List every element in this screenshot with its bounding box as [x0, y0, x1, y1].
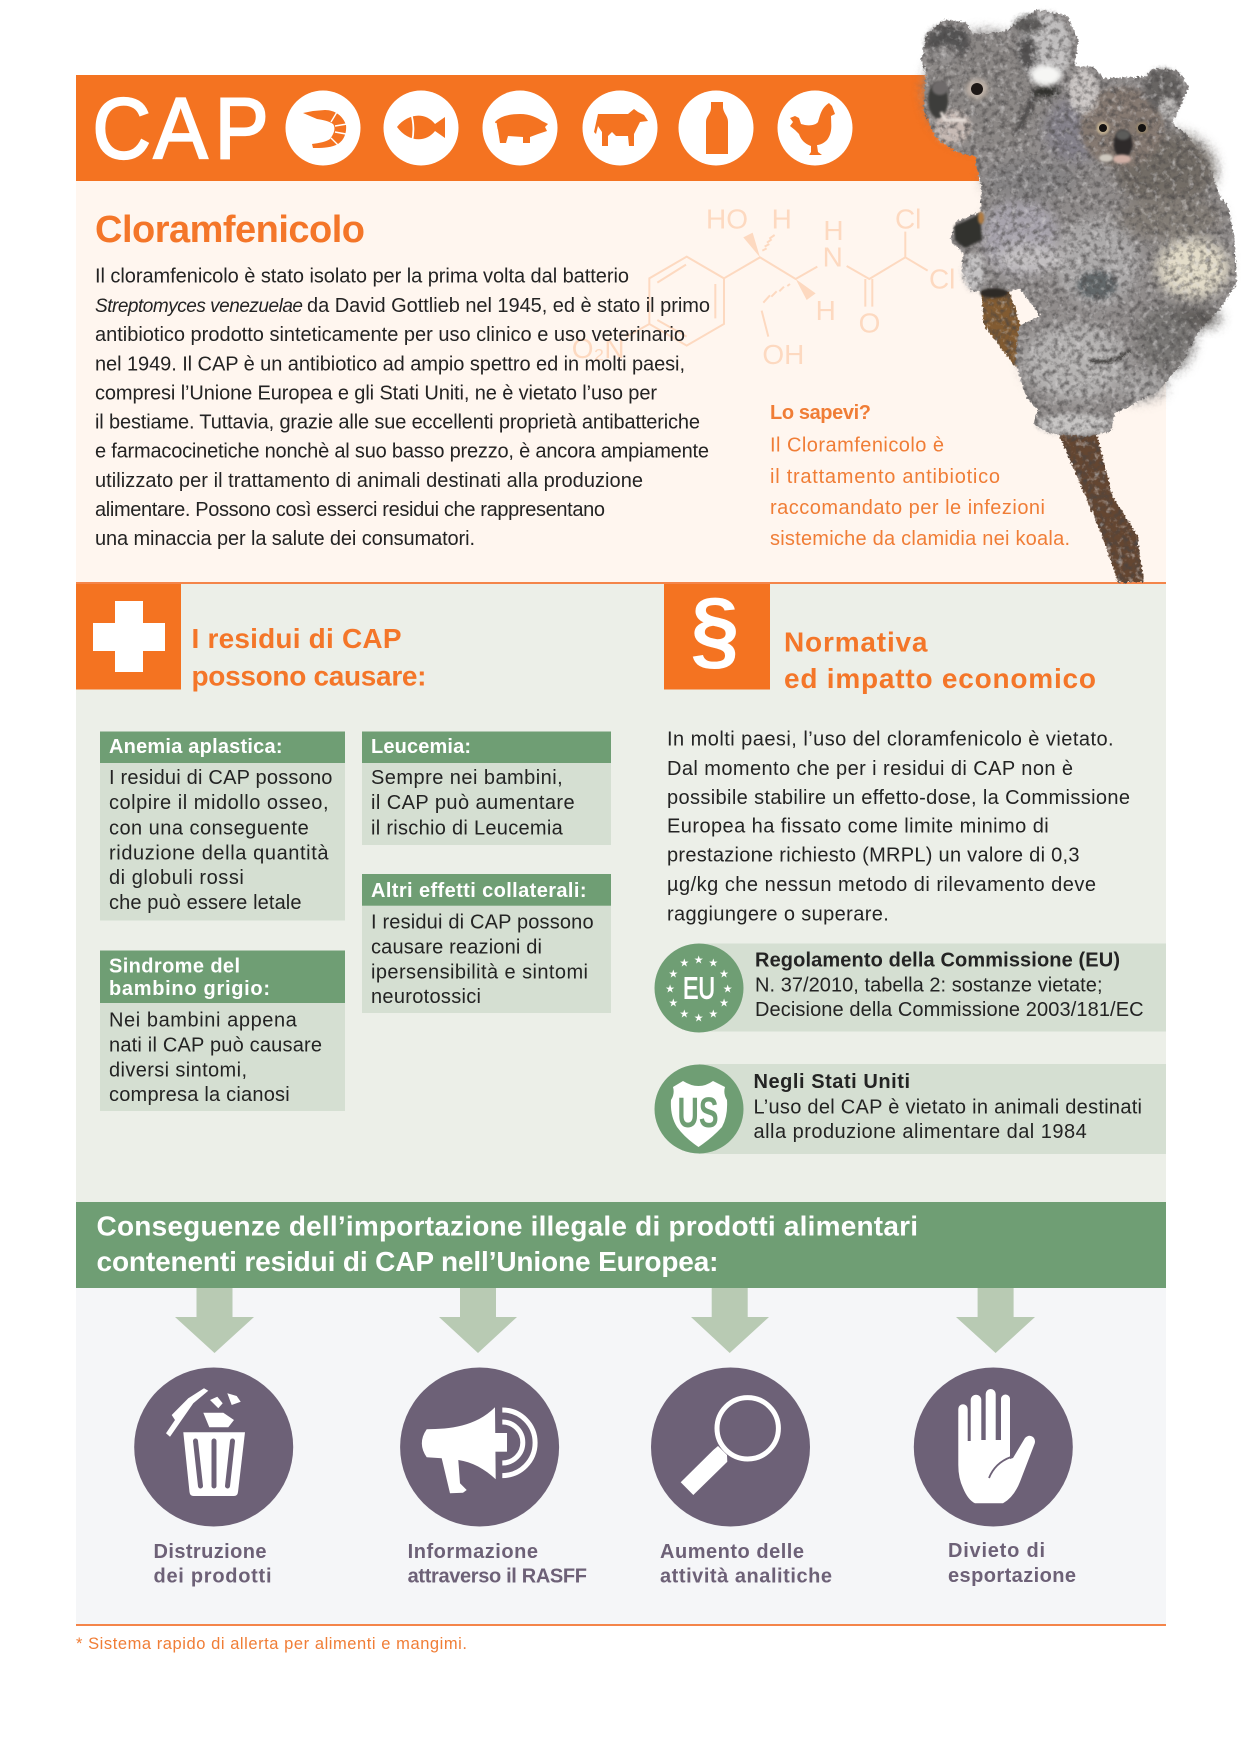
callout: United States: Negli Stati Uniti — [754, 1071, 910, 1093]
card: Sindrome del bambino grigio — [100, 950, 345, 1111]
icon: US shield badge — [654, 1064, 744, 1154]
text block: regulation: prestazione richiesto (MRPL) un valore di 0,3 — [667, 845, 1080, 867]
text block: regulation: raggiungere o superare. — [667, 904, 889, 926]
icon: EU stars badge — [654, 944, 744, 1032]
chemical structure watermark: Cl — [929, 263, 955, 294]
callout: United States — [654, 1064, 1166, 1154]
icon box: medical cross — [76, 584, 181, 690]
heading: Normativa ed impatto economico: Normativa — [784, 626, 928, 658]
icon: EU stars badge: ★ — [708, 958, 718, 970]
arrow 2 — [439, 1288, 517, 1353]
body shading — [982, 198, 1058, 274]
text block: regulation — [667, 729, 1130, 926]
callout: EU regulation: Regolamento della Commissione (EU) — [755, 950, 1120, 972]
icon: EU stars badge: ★ — [708, 1008, 718, 1020]
banner: consequences of illegal import: Conseguenze dell’importazione illegale di prodotti alimentari — [96, 1211, 918, 1242]
chemical structure watermark — [572, 203, 955, 370]
text block: intro: Il cloramfenicolo è stato isolato per la prima volta dal batterio — [95, 266, 629, 288]
label: analytics: Aumento delle — [660, 1541, 804, 1563]
icon: EU stars badge: ★ — [694, 1012, 704, 1024]
chemical structure watermark: H — [772, 203, 792, 234]
banner: consequences of illegal import — [76, 1202, 1166, 1288]
icon: EU stars badge: ★ — [719, 997, 729, 1009]
panel: intro background — [76, 181, 1166, 583]
card: Sindrome del bambino grigio: compresa la cianosi — [109, 1084, 290, 1106]
big koala head — [925, 32, 1045, 148]
header banner — [76, 75, 979, 181]
chemical structure watermark: O — [859, 308, 880, 339]
text block: regulation: possibile stabilire un effetto-dose, la Commissione — [667, 787, 1130, 809]
text block: intro: il bestiame. Tuttavia, grazie alle sue eccellenti proprietà antibatteriche — [95, 412, 700, 434]
icon: EU stars badge: ★ — [694, 954, 704, 966]
callout: Lo sapevi?: Il Cloramfenicolo è — [770, 435, 944, 457]
card: Anemia aplastica: di globuli rossi — [109, 867, 244, 889]
chemical structure watermark: H — [823, 215, 844, 246]
card: Altri effetti collaterali: I residui di CAP possono — [371, 912, 594, 934]
card: Leucemia: il rischio di Leucemia — [371, 818, 564, 840]
card: Leucemia: il CAP può aumentare — [371, 792, 575, 814]
arrow 4 — [956, 1288, 1035, 1353]
faces and paw — [928, 65, 1148, 298]
icon: magnifying glass — [651, 1368, 810, 1526]
text block: intro: una minaccia per la salute dei consumatori. — [95, 528, 475, 550]
icon: shrimp — [286, 90, 360, 166]
icon: raised hand — [914, 1368, 1073, 1526]
text block: intro: utilizzato per il trattamento di animali destinati alla produzione — [95, 470, 643, 492]
icon: EU stars badge: ★ — [668, 968, 678, 980]
icon: fish — [384, 90, 458, 166]
icon: chicken — [778, 90, 852, 166]
card: Altri effetti collaterali — [362, 874, 611, 1013]
arrow 3 — [691, 1288, 769, 1353]
chemical structure watermark: Cl — [895, 203, 921, 234]
icon: milk bottle — [678, 90, 754, 166]
icon: waste bin — [134, 1368, 293, 1526]
text block: regulation: Dal momento che per i residui di CAP non è — [667, 758, 1073, 780]
card: Sindrome del bambino grigio: diversi sintomi, — [109, 1059, 247, 1081]
label: RASFF: Informazione — [408, 1541, 538, 1563]
icon: megaphone — [400, 1368, 559, 1526]
card: Altri effetti collaterali: neurotossici — [371, 986, 481, 1008]
footnote: * Sistema rapido di allerta per alimenti e mangimi. — [76, 1635, 467, 1653]
chemical structure watermark: O₂N — [572, 333, 625, 364]
card: Sindrome del bambino grigio: bambino grigio: — [109, 978, 270, 1000]
label: destruction — [154, 1541, 272, 1588]
callout: Lo sapevi?: Lo sapevi? — [770, 402, 871, 424]
icon: EU stars badge: EU — [683, 971, 715, 1005]
card: Altri effetti collaterali: ipersensibilità e sintomi — [371, 961, 588, 983]
label: analytics: attività analitiche — [660, 1566, 832, 1588]
icon: EU stars badge: ★ — [719, 968, 729, 980]
icon: EU stars badge: ★ — [665, 983, 675, 995]
chemical structure watermark: OH — [762, 339, 804, 370]
arrow 1 — [175, 1288, 254, 1353]
label: RASFF — [408, 1541, 587, 1588]
icon: EU stars badge: ★ — [679, 958, 689, 970]
icon: EU stars badge: ★ — [668, 997, 678, 1009]
photo illustration: koalas on a branch — [923, 11, 1235, 582]
icon: US shield badge: US — [678, 1089, 718, 1137]
branch — [981, 288, 1144, 582]
icon: EU stars badge: ★ — [723, 983, 733, 995]
banner: consequences of illegal import: contenenti residui di CAP nell’Unione Europea: — [96, 1246, 718, 1277]
callout: Lo sapevi?: sistemiche da clamidia nei koala. — [770, 528, 1070, 550]
koala fur — [923, 11, 1235, 435]
icon box: paragraph sign: § — [691, 579, 739, 678]
chemical structure watermark: HO — [706, 203, 748, 234]
card: Anemia aplastica: con una conseguente — [109, 818, 309, 840]
card: Leucemia: Leucemia: — [371, 736, 471, 758]
card: Anemia aplastica: riduzione della quantità — [109, 842, 329, 864]
text block: intro: da David Gottlieb nel 1945, ed è stato il primo — [307, 295, 710, 317]
heading: Normativa ed impatto economico: ed impatto economico — [784, 663, 1096, 694]
icon box: paragraph sign — [664, 579, 770, 690]
chemical structure watermark: N — [823, 242, 843, 273]
text block: intro: Streptomyces venezuelae — [95, 296, 303, 317]
text block: intro — [95, 266, 710, 550]
card: Anemia aplastica: Anemia aplastica: — [109, 736, 282, 758]
panel: consequences background — [76, 1288, 1166, 1624]
text block: regulation: In molti paesi, l’uso del cloramfenicolo è vietato. — [667, 729, 1114, 751]
label: export ban: Divieto di — [948, 1540, 1045, 1562]
callout: Lo sapevi? — [770, 402, 1070, 550]
icon: EU stars badge: ★ — [679, 1008, 689, 1020]
heading: I residui di CAP possono causare — [192, 623, 426, 692]
card: Sindrome del bambino grigio: nati il CAP può causare — [109, 1034, 322, 1056]
label: destruction: dei prodotti — [154, 1566, 272, 1588]
heading: I residui di CAP possono causare: possono causare: — [192, 660, 426, 692]
callout: EU regulation: N. 37/2010, tabella 2: sostanze vietate; — [755, 974, 1102, 996]
text block: intro: nel 1949. Il CAP è un antibiotico ad ampio spettro ed in molti paesi, — [95, 354, 685, 376]
card: Anemia aplastica — [100, 732, 345, 920]
callout: United States: L’uso del CAP è vietato in animali destinati — [754, 1096, 1142, 1118]
card: Leucemia — [362, 732, 611, 845]
callout: Lo sapevi?: raccomandato per le infezioni — [770, 497, 1045, 519]
card: Sindrome del bambino grigio: Nei bambini appena — [109, 1010, 298, 1032]
callout: Lo sapevi?: il trattamento antibiotico — [770, 466, 1000, 488]
text block: intro: e farmacocinetiche nonchè al suo basso prezzo, è ancora ampiamente — [95, 441, 709, 463]
callout: United States: alla produzione alimentare dal 1984 — [754, 1121, 1087, 1143]
icon: cow — [582, 90, 658, 166]
text block: regulation: µg/kg che nessun metodo di rilevamento deve — [667, 874, 1096, 896]
label: export ban: esportazione — [948, 1565, 1076, 1587]
card: Altri effetti collaterali: Altri effetti collaterali: — [371, 880, 586, 902]
baby koala head — [1080, 87, 1164, 167]
heading: Normativa ed impatto economico — [784, 626, 1096, 694]
card: Anemia aplastica: colpire il midollo osseo, — [109, 792, 328, 814]
title: CAP: CAP — [92, 80, 269, 177]
label: RASFF: attraverso il RASFF — [408, 1566, 587, 1588]
text block: intro: compresi l’Unione Europea e gli Stati Uniti, ne è vietato l’uso per — [95, 382, 657, 404]
label: export ban — [948, 1540, 1076, 1587]
heading: Cloramfenicolo: Cloramfenicolo — [95, 209, 365, 251]
heading: I residui di CAP possono causare: I residui di CAP — [192, 623, 402, 654]
icon: pig — [482, 90, 558, 166]
label: destruction: Distruzione — [154, 1541, 266, 1563]
card: Anemia aplastica: che può essere letale — [109, 892, 302, 914]
callout: EU regulation: Decisione della Commissione 2003/181/EC — [755, 999, 1144, 1021]
text block: intro: alimentare. Possono così esserci residui che rappresentano — [95, 499, 605, 521]
text block: intro: antibiotico prodotto sinteticamente per uso clinico e uso veterinario — [95, 324, 685, 346]
chemical structure watermark: H — [816, 295, 836, 326]
card: Altri effetti collaterali: causare reazioni di — [371, 936, 542, 958]
panel: health and regulation background — [76, 584, 1166, 1202]
callout: EU regulation — [654, 944, 1166, 1032]
card: Sindrome del bambino grigio: Sindrome del — [109, 955, 240, 977]
card: Leucemia: Sempre nei bambini, — [371, 767, 563, 789]
text block: regulation: Europea ha fissato come limite minimo di — [667, 816, 1049, 838]
card: Anemia aplastica: I residui di CAP possono — [109, 767, 332, 789]
label: analytics — [660, 1541, 832, 1588]
